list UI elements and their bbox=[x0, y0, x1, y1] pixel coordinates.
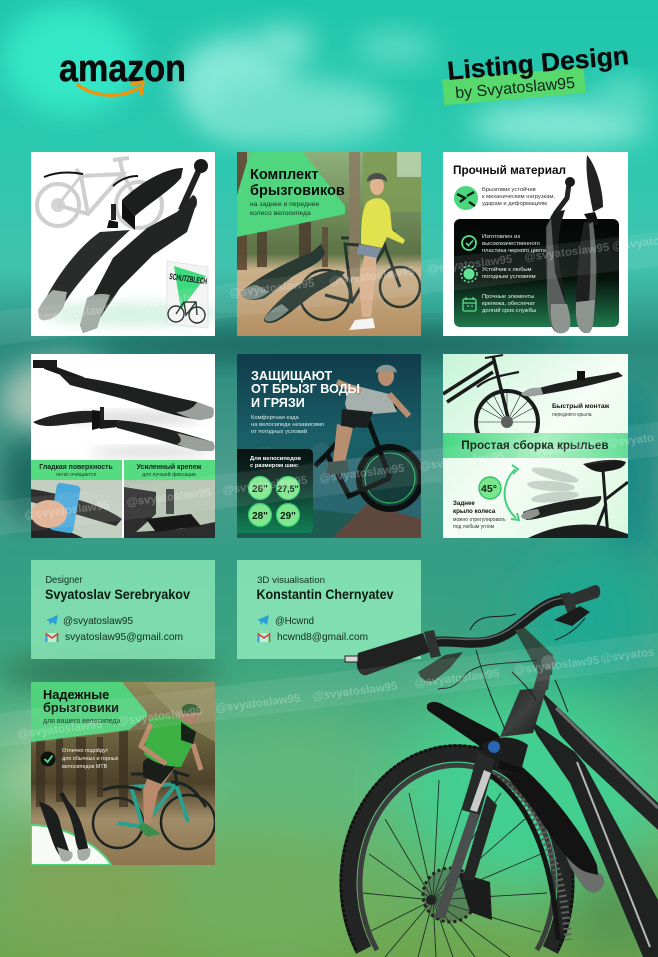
panel: protection in rain bbox=[237, 354, 421, 538]
large bicycle bbox=[341, 585, 658, 957]
size 28: 28" bbox=[252, 511, 268, 522]
text: material: высококачественного bbox=[482, 241, 540, 247]
grip right bbox=[563, 585, 600, 605]
card: 3d visualisation: 3D visualisation bbox=[257, 575, 325, 586]
product box: SCHUTZBLECH bbox=[167, 261, 208, 328]
forest trunks bbox=[237, 152, 421, 277]
banner: prostaya sborka: Простая сборка крыльев bbox=[461, 438, 609, 452]
title: Listing Design bbox=[440, 40, 632, 105]
icon: gmail bbox=[46, 633, 58, 642]
subheading: Комфортная езда bbox=[251, 415, 300, 421]
card: designer: Designer bbox=[46, 575, 83, 586]
icon: amazon smile arrow bbox=[78, 82, 143, 95]
fender: rear green-tinted bbox=[241, 244, 325, 300]
frame: top tube bbox=[540, 690, 658, 830]
text: resistance: к механическим нагрузкам, bbox=[482, 194, 555, 200]
fender: rear bbox=[80, 159, 208, 333]
grip left bbox=[357, 633, 430, 675]
feature: smooth surface: Гладкая поверхность bbox=[39, 464, 113, 471]
panel: simple assembly bbox=[443, 354, 628, 538]
watermark text: @svyatoslaw95 bbox=[524, 242, 611, 264]
card: 3d visualisation: hcwnd8@gmail.com bbox=[277, 632, 368, 643]
text: suitable: Отлично подойдут bbox=[62, 747, 109, 754]
text: quick install: Быстрый монтаж bbox=[552, 402, 610, 410]
text: resistance: ударам и деформациям bbox=[482, 201, 547, 207]
icon: telegram bbox=[46, 615, 58, 625]
heading: ОТ БРЫЗГ ВОДЫ bbox=[251, 382, 360, 396]
logo: amazon: amazon bbox=[59, 48, 186, 90]
tyre sizes panel: Для велосипедов bbox=[250, 456, 301, 462]
text: rear fender: Заднее bbox=[453, 500, 475, 507]
watermark text: @svyato bbox=[606, 432, 655, 450]
brake levers bbox=[554, 606, 590, 626]
clouds bbox=[2, 5, 651, 147]
feature: reinforced fixing: Усиленный крепеж bbox=[137, 463, 201, 471]
text: fasteners: долгий срок службы bbox=[482, 307, 536, 314]
text: weather: погодным условиям bbox=[482, 274, 536, 280]
rider and bike bbox=[315, 365, 421, 509]
heading: Надежные bbox=[43, 687, 109, 702]
text: rear fender: можно отрегулировать bbox=[453, 517, 506, 523]
rider bbox=[138, 704, 201, 837]
watermark text: @svyatoslaw95 bbox=[117, 706, 204, 728]
frame: down tube bbox=[530, 720, 658, 957]
spokes bbox=[363, 780, 547, 957]
text: fasteners: крепежа, обеспечат bbox=[482, 301, 535, 307]
panel: komplekt bryzgovikov bbox=[237, 152, 421, 336]
fender: front product bbox=[521, 372, 623, 396]
feature: smooth surface bbox=[31, 460, 122, 538]
card: 3d visualisation bbox=[237, 560, 421, 659]
badge: 45 degrees: 45° bbox=[481, 483, 497, 495]
watermark text: @svyatoslaw95 bbox=[24, 500, 111, 522]
fender: left bbox=[546, 177, 575, 333]
fender: top bbox=[33, 360, 214, 420]
icon: impact bbox=[454, 186, 478, 210]
text: resistance: Брызговик устойчив bbox=[482, 186, 536, 193]
fender: bottom bbox=[33, 407, 215, 451]
heading: брызговики bbox=[43, 700, 119, 715]
card: designer bbox=[31, 560, 215, 659]
subheading: на заднее и переднее bbox=[250, 201, 320, 208]
card: 3d visualisation: @Hcwnd bbox=[275, 616, 314, 627]
heading: Комплект bbox=[250, 167, 318, 183]
feature: smooth surface: легко очищается bbox=[56, 472, 96, 478]
head tube bbox=[500, 687, 547, 737]
text: suitable: для обычных и горных bbox=[62, 756, 119, 762]
subheading: для вашего велосипеда bbox=[43, 718, 121, 725]
icon: gmail bbox=[258, 633, 270, 642]
text: rear fender: крыло колеса bbox=[453, 508, 496, 515]
dark panel bbox=[454, 219, 619, 327]
brake disc bbox=[423, 868, 492, 922]
heading: И ГРЯЗИ bbox=[251, 396, 305, 410]
heading: ЗАЩИЩАЮТ bbox=[251, 369, 332, 383]
text: quick install: переднего крыла bbox=[552, 412, 592, 418]
card: designer: Svyatoslav Serebryakov bbox=[45, 587, 190, 602]
panel: two fenders with features bbox=[31, 354, 215, 538]
feature: reinforced fixing: для лучшей фиксации bbox=[142, 471, 196, 478]
watermark text: @svyatoslaw95 bbox=[129, 290, 216, 312]
banner: prostaya sborka bbox=[443, 433, 628, 458]
size 26: 26" bbox=[252, 484, 268, 495]
bicycle bbox=[300, 232, 420, 320]
watermark text: @svyatoslaw95 bbox=[312, 681, 399, 703]
size 29: 29" bbox=[280, 511, 296, 522]
bicycle bbox=[93, 770, 215, 849]
front wheel tyre bbox=[341, 746, 573, 950]
panel: fenders on white bbox=[31, 152, 215, 336]
watermark text: @svyatoslaw95 bbox=[319, 463, 406, 485]
card: designer: @svyatoslaw95 bbox=[63, 616, 133, 627]
watermark text: @svyatoslaw95 bbox=[414, 668, 501, 690]
fender: front green-tinted bbox=[264, 270, 345, 323]
icon: calendar bbox=[463, 297, 476, 311]
heading: Прочный материал bbox=[453, 163, 566, 177]
banner bbox=[31, 682, 147, 742]
watermark text: @svyatoslaw95 bbox=[427, 254, 514, 276]
text: material: пластика черного цвета bbox=[482, 248, 547, 254]
watermark text: @svyatoslaw95 bbox=[419, 451, 506, 473]
text: weather: Устойчив к любым bbox=[482, 266, 532, 273]
arrow: angle arc bbox=[505, 465, 519, 520]
fork crown and legs bbox=[426, 738, 528, 918]
icon: weather bbox=[461, 266, 477, 282]
cables bbox=[438, 614, 585, 730]
woman bbox=[349, 173, 405, 330]
title: Listing Design: Listing Design bbox=[446, 40, 630, 86]
icon: badge check bbox=[462, 236, 476, 250]
bike front bbox=[443, 355, 538, 453]
watermark bands bbox=[0, 232, 658, 747]
fender: right bbox=[576, 155, 603, 333]
stem bbox=[515, 628, 553, 675]
rear area bbox=[521, 460, 628, 538]
watermark text: @svyatoslaw95 bbox=[215, 693, 302, 715]
fender: front bbox=[38, 168, 183, 320]
watermark text: @svyatoslaw95 bbox=[32, 303, 119, 325]
feature: reinforced fixing bbox=[124, 460, 215, 538]
watermark text: @svyatoslaw95 bbox=[514, 655, 601, 677]
fender: large front bbox=[427, 702, 604, 893]
icon: grey bicycle bbox=[37, 158, 162, 228]
banner: green shape bbox=[237, 152, 345, 237]
watermark text: @svyatos bbox=[600, 646, 655, 665]
subheading: от погодных условий bbox=[251, 428, 307, 435]
tyre sizes panel: с размером шин: bbox=[250, 463, 299, 469]
forest bbox=[36, 722, 128, 807]
watermark text: @svyatoslaw95 bbox=[517, 439, 604, 461]
handlebar bbox=[345, 585, 600, 730]
corner with fenders bbox=[31, 792, 111, 865]
tyre sizes panel bbox=[237, 449, 313, 533]
watermark text: @svyatoslaw95 bbox=[126, 487, 213, 509]
watermark text bbox=[17, 235, 658, 741]
icon: telegram bbox=[257, 615, 269, 625]
text: suitable: велосипедов МТВ bbox=[62, 764, 108, 770]
text: fasteners: Прочные элементы bbox=[482, 294, 534, 300]
shadows bbox=[71, 413, 213, 456]
text: rear fender: под любым углом bbox=[453, 524, 495, 530]
panel: reliable fenders bbox=[31, 682, 215, 865]
card: designer: svyatoslaw95@gmail.com bbox=[65, 632, 183, 643]
watermark text: @svyatoslaw95 bbox=[17, 719, 104, 741]
watermark text: @svyatoslaw95 bbox=[229, 278, 316, 300]
text: material: Изготовлен из bbox=[482, 234, 520, 240]
rear fork leg bbox=[462, 795, 497, 880]
subheading: колесо велосипеда bbox=[250, 210, 311, 217]
watermark text: @svyatoslaw95 bbox=[329, 266, 416, 288]
heading: брызговиков bbox=[250, 183, 345, 199]
icon: check bbox=[40, 752, 56, 766]
watermark text: @svyatoslaw95 bbox=[222, 475, 309, 497]
size 27.5: 27,5" bbox=[277, 484, 299, 494]
mountains bbox=[237, 442, 421, 538]
badge: 45 degrees bbox=[479, 477, 501, 499]
panel: prochny material bbox=[443, 152, 628, 336]
title: Listing Design: by Svyatoslaw95 bbox=[455, 75, 576, 102]
card: 3d visualisation: Konstantin Chernyatev bbox=[256, 587, 394, 602]
subheading: на велосипеде независимо bbox=[251, 422, 324, 428]
